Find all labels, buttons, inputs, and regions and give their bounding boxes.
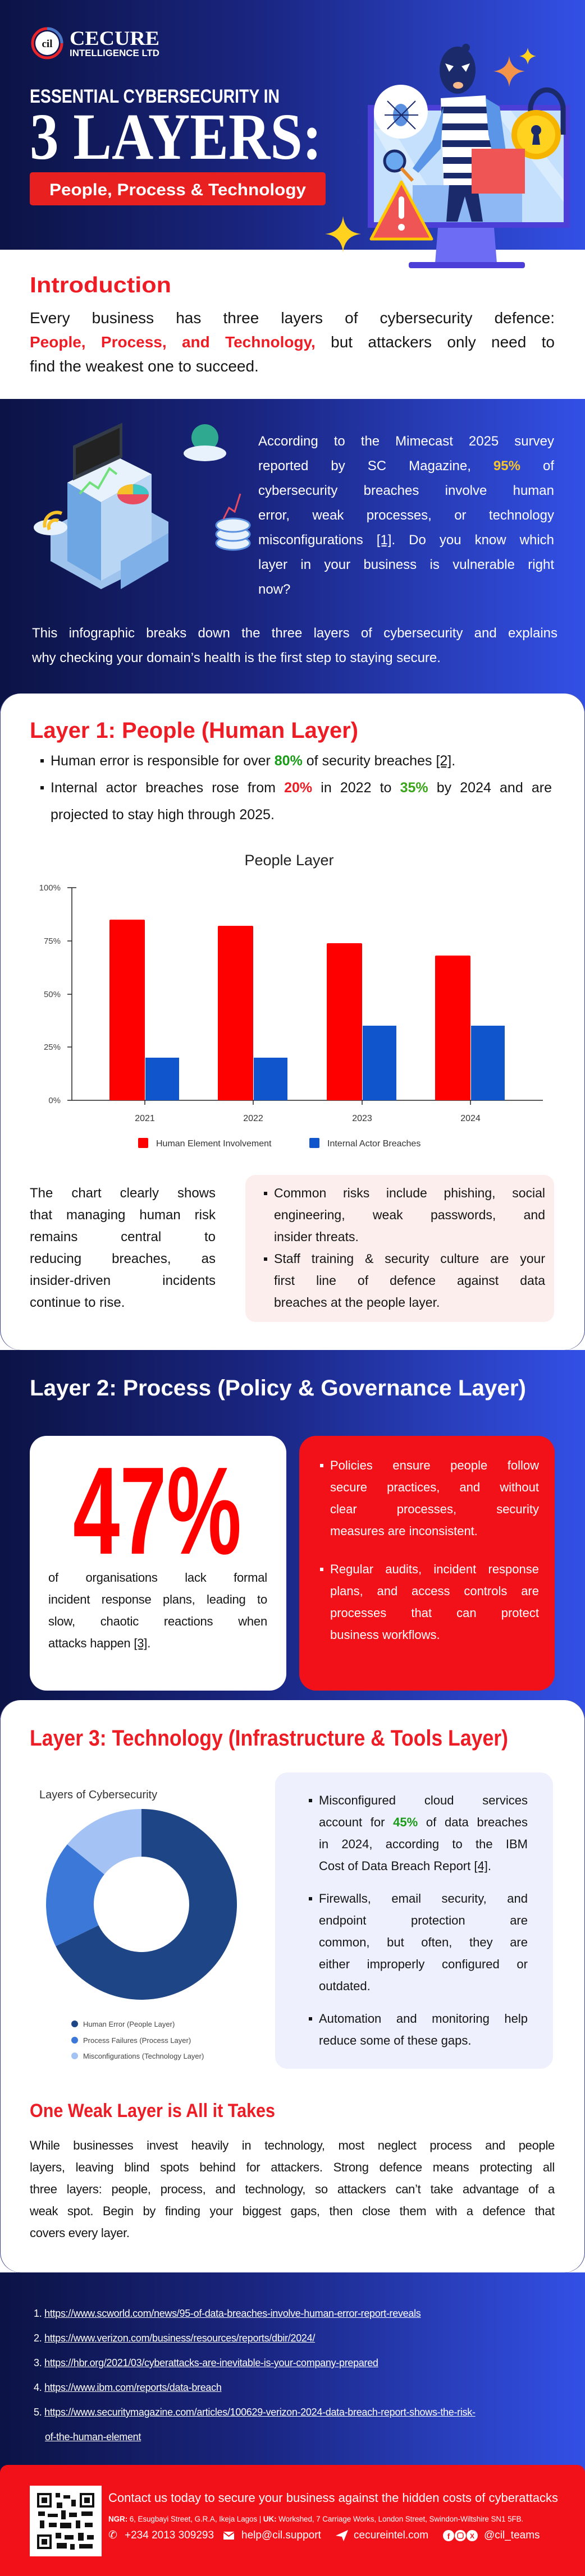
callout: technology facts: in 2024, according to the IBM	[319, 1837, 528, 1851]
references section	[0, 2272, 585, 2474]
bar chart: People Layer: 50%	[44, 990, 61, 999]
donut chart: layers of cybersecurity: Misconfigurations (Technology Layer)	[83, 2052, 204, 2060]
panel: layer 1 people	[0, 694, 585, 1350]
infographic purpose text	[32, 626, 557, 665]
contact details row: @cil_teams	[484, 2529, 540, 2541]
icons: social	[443, 2530, 478, 2541]
intro paragraph	[30, 309, 555, 375]
panel: layer 2 process (blue)	[0, 1350, 585, 1720]
bar chart: People Layer	[39, 852, 543, 1149]
contact details row	[108, 2529, 540, 2541]
bullets: people stats: projected to stay high through 2025.	[51, 807, 275, 823]
bullets: people stats: Human error is responsible for over 80% of security breaches [2].	[51, 753, 455, 769]
conclusion paragraph: weak spot. Begin by finding your biggest gaps, then close them with a defence that	[30, 2204, 555, 2218]
stat card: 47%	[30, 1436, 286, 1691]
callout: common risks: first line of defence against data	[274, 1273, 545, 1288]
callout: technology facts	[275, 1773, 553, 2069]
callout: technology facts: reduce some of these gaps.	[319, 2033, 472, 2047]
contact details row: +234 2013 309293	[125, 2529, 214, 2541]
hero illustration: thief at monitor	[325, 44, 570, 268]
donut chart: layers of cybersecurity: Layers of Cybersecurity	[39, 1789, 157, 1801]
heading: Layer 1: Layer 1: People (Human Layer)	[30, 718, 358, 743]
QR code	[30, 2486, 102, 2556]
text: chart summary: insider-driven incidents	[30, 1273, 216, 1288]
references list: 1. https://www.scworld.com/news/95-of-data-breaches-involve-human-error-report-reveals	[34, 2308, 421, 2319]
stat card: 47%: incident response plans, leading to	[48, 1592, 267, 1606]
intro paragraph: People, Process, and Technology, but attackers only need to	[30, 333, 555, 351]
text: chart summary: reducing breaches, as	[30, 1251, 216, 1266]
callout: common risks: Common risks include phishing, social	[274, 1186, 545, 1200]
stat card: 47%: slow, chaotic reactions when	[48, 1614, 267, 1628]
text: chart summary: that managing human risk	[30, 1207, 216, 1223]
references list: 3. https://hbr.org/2021/03/cyberattacks-are-inevitable-is-your-company-prepared	[34, 2357, 378, 2368]
footer contact bar	[0, 2465, 585, 2576]
bar chart: People Layer: 100%	[39, 883, 61, 893]
bar chart: People Layer: 2024	[460, 1114, 481, 1123]
callout: policies (red): processes that can protect	[330, 1606, 539, 1620]
conclusion paragraph: three layers: people, process, and technology, so attackers can’t take advantage of a	[30, 2182, 555, 2196]
survey text: According to the Mimecast 2025 survey	[258, 434, 554, 449]
donut chart: layers of cybersecurity: Human Error (People Layer)	[83, 2020, 175, 2028]
callout: technology facts: outdated.	[319, 1979, 371, 1993]
callout: technology facts: account for 45% of data breaches	[319, 1815, 528, 1829]
callout: technology facts: Cost of Data Breach Report [4].	[319, 1859, 491, 1873]
callout: technology facts: common, but often, they are	[319, 1935, 528, 1949]
contact details row: help@cil.support	[241, 2529, 321, 2541]
conclusion paragraph: layers, leaving blind spots behind for attackers. Strong defence means protecting all	[30, 2160, 555, 2174]
callout: policies (red)	[299, 1436, 555, 1691]
references list	[34, 2308, 476, 2442]
bar chart: People Layer: People Layer	[244, 852, 334, 869]
address line: NGR: 6, Esugbayi Street, G.R.A, Ikeja Lagos | UK: Workshed, 7 Carriage Works, London Street, Swindon-Wiltshire SN1 5FB.	[108, 2515, 523, 2523]
callout: policies (red): plans, and access controls are	[330, 1584, 539, 1598]
bullets: people stats: Internal actor breaches rose from 20% in 2022 to 35% by 2024 and are	[51, 780, 552, 796]
callout: technology facts: Automation and monitoring help	[319, 2012, 528, 2026]
stat card: 47%: attacks happen [3].	[48, 1636, 150, 1650]
callout: common risks: insider threats.	[274, 1229, 359, 1244]
references list: 5. https://www.securitymagazine.com/articles/100629-verizon-2024-data-breach-report-shows-the-risk-	[34, 2407, 476, 2418]
logo	[31, 27, 159, 59]
callout: policies (red): clear processes, security	[330, 1502, 539, 1516]
heading: Introduction: Introduction	[30, 273, 171, 297]
survey text: reported by SC Magazine, 95% of	[258, 458, 554, 474]
callout: policies (red): measures are inconsistent.	[330, 1524, 478, 1538]
contact call to action: Contact us today to secure your business against the hidden costs of cyberattacks	[108, 2491, 558, 2505]
survey text: cybersecurity breaches involve human	[258, 483, 554, 498]
icon: phone: ✆	[108, 2529, 117, 2541]
icon: mail	[223, 2532, 234, 2540]
callout: common risks: breaches at the people layer.	[274, 1295, 440, 1310]
text: chart summary	[30, 1186, 216, 1310]
text: chart summary: The chart clearly shows	[30, 1186, 216, 1201]
subtitle button: People, Process & Technology	[49, 181, 306, 199]
text: chart summary: remains central to	[30, 1229, 216, 1245]
logo: INTELLIGENCE LTD	[70, 48, 159, 58]
donut chart: layers of cybersecurity: Process Failures (Process Layer)	[83, 2036, 191, 2045]
bar chart: People Layer: 2023	[352, 1114, 372, 1123]
references list: of-the-human-element	[45, 2431, 141, 2442]
callout: technology facts: endpoint protection are	[319, 1913, 528, 1927]
icons: social: X	[470, 2532, 474, 2540]
callout: policies (red): business workflows.	[330, 1628, 440, 1642]
bar chart: People Layer: Human Element Involvement	[156, 1139, 272, 1149]
survey text: misconfigurations [1]. Do you know which	[258, 532, 554, 548]
text: chart summary: continue to rise.	[30, 1295, 125, 1310]
conclusion paragraph: While businesses invest heavily in technology, most neglect process and people	[30, 2138, 555, 2152]
infographic purpose text: This infographic breaks down the three layers of cybersecurity and explains	[32, 626, 557, 641]
panel: survey intro (blue)	[0, 399, 585, 713]
callout: technology facts: either improperly configured or	[319, 1957, 528, 1971]
callout: policies (red): Policies ensure people follow	[330, 1458, 539, 1472]
logo: cil	[42, 38, 53, 50]
bar chart: People Layer: Internal Actor Breaches	[327, 1139, 421, 1149]
bullets: people stats	[40, 753, 552, 823]
survey text: layer in your business is vulnerable right	[258, 557, 554, 572]
infographic purpose text: why checking your domain’s health is the first step to staying secure.	[32, 650, 441, 665]
logo: CECURE	[70, 27, 159, 49]
heading: Layer 2: Layer 2: Process (Policy & Governance Layer)	[30, 1376, 526, 1401]
callout: common risks	[245, 1175, 554, 1322]
conclusion paragraph: covers every layer.	[30, 2226, 130, 2240]
survey text: now?	[258, 582, 290, 597]
illustration: isometric data tower	[34, 423, 250, 589]
survey text: error, weak processes, or technology	[258, 508, 554, 523]
stat card: 47%: of organisations lack formal	[48, 1571, 267, 1585]
callout: policies (red): Regular audits, incident response	[330, 1562, 539, 1576]
callout: technology facts: Firewalls, email security, and	[319, 1891, 528, 1905]
bar chart: People Layer: 0%	[48, 1096, 61, 1105]
icon: send	[336, 2530, 348, 2541]
contact details row: cecureintel.com	[354, 2529, 428, 2541]
subtitle button	[30, 172, 326, 205]
bar chart: People Layer: 25%	[44, 1043, 61, 1052]
survey text	[258, 434, 555, 597]
header banner	[0, 0, 585, 250]
panel: layer 3 technology	[0, 1700, 585, 2272]
bar chart: People Layer: 2022	[243, 1114, 263, 1123]
intro paragraph: Every business has three layers of cybersecurity defence:	[30, 309, 555, 327]
callout: common risks: engineering, weak passwords, and	[274, 1207, 545, 1222]
donut chart: layers of cybersecurity	[39, 1789, 237, 2060]
callout: technology facts: Misconfigured cloud services	[319, 1793, 528, 1807]
bar chart: People Layer: 75%	[44, 936, 61, 946]
callout: common risks: Staff training & security culture are your	[274, 1251, 545, 1266]
references list: 2. https://www.verizon.com/business/resources/reports/dbir/2024/	[34, 2332, 315, 2344]
bar chart: People Layer: 2021	[135, 1114, 155, 1123]
intro paragraph: find the weakest one to succeed.	[30, 357, 259, 375]
conclusion paragraph	[30, 2138, 555, 2240]
references list: 4. https://www.ibm.com/reports/data-breach	[34, 2382, 222, 2393]
callout: policies (red): secure practices, and without	[330, 1480, 539, 1494]
icons: social: f	[447, 2532, 450, 2541]
